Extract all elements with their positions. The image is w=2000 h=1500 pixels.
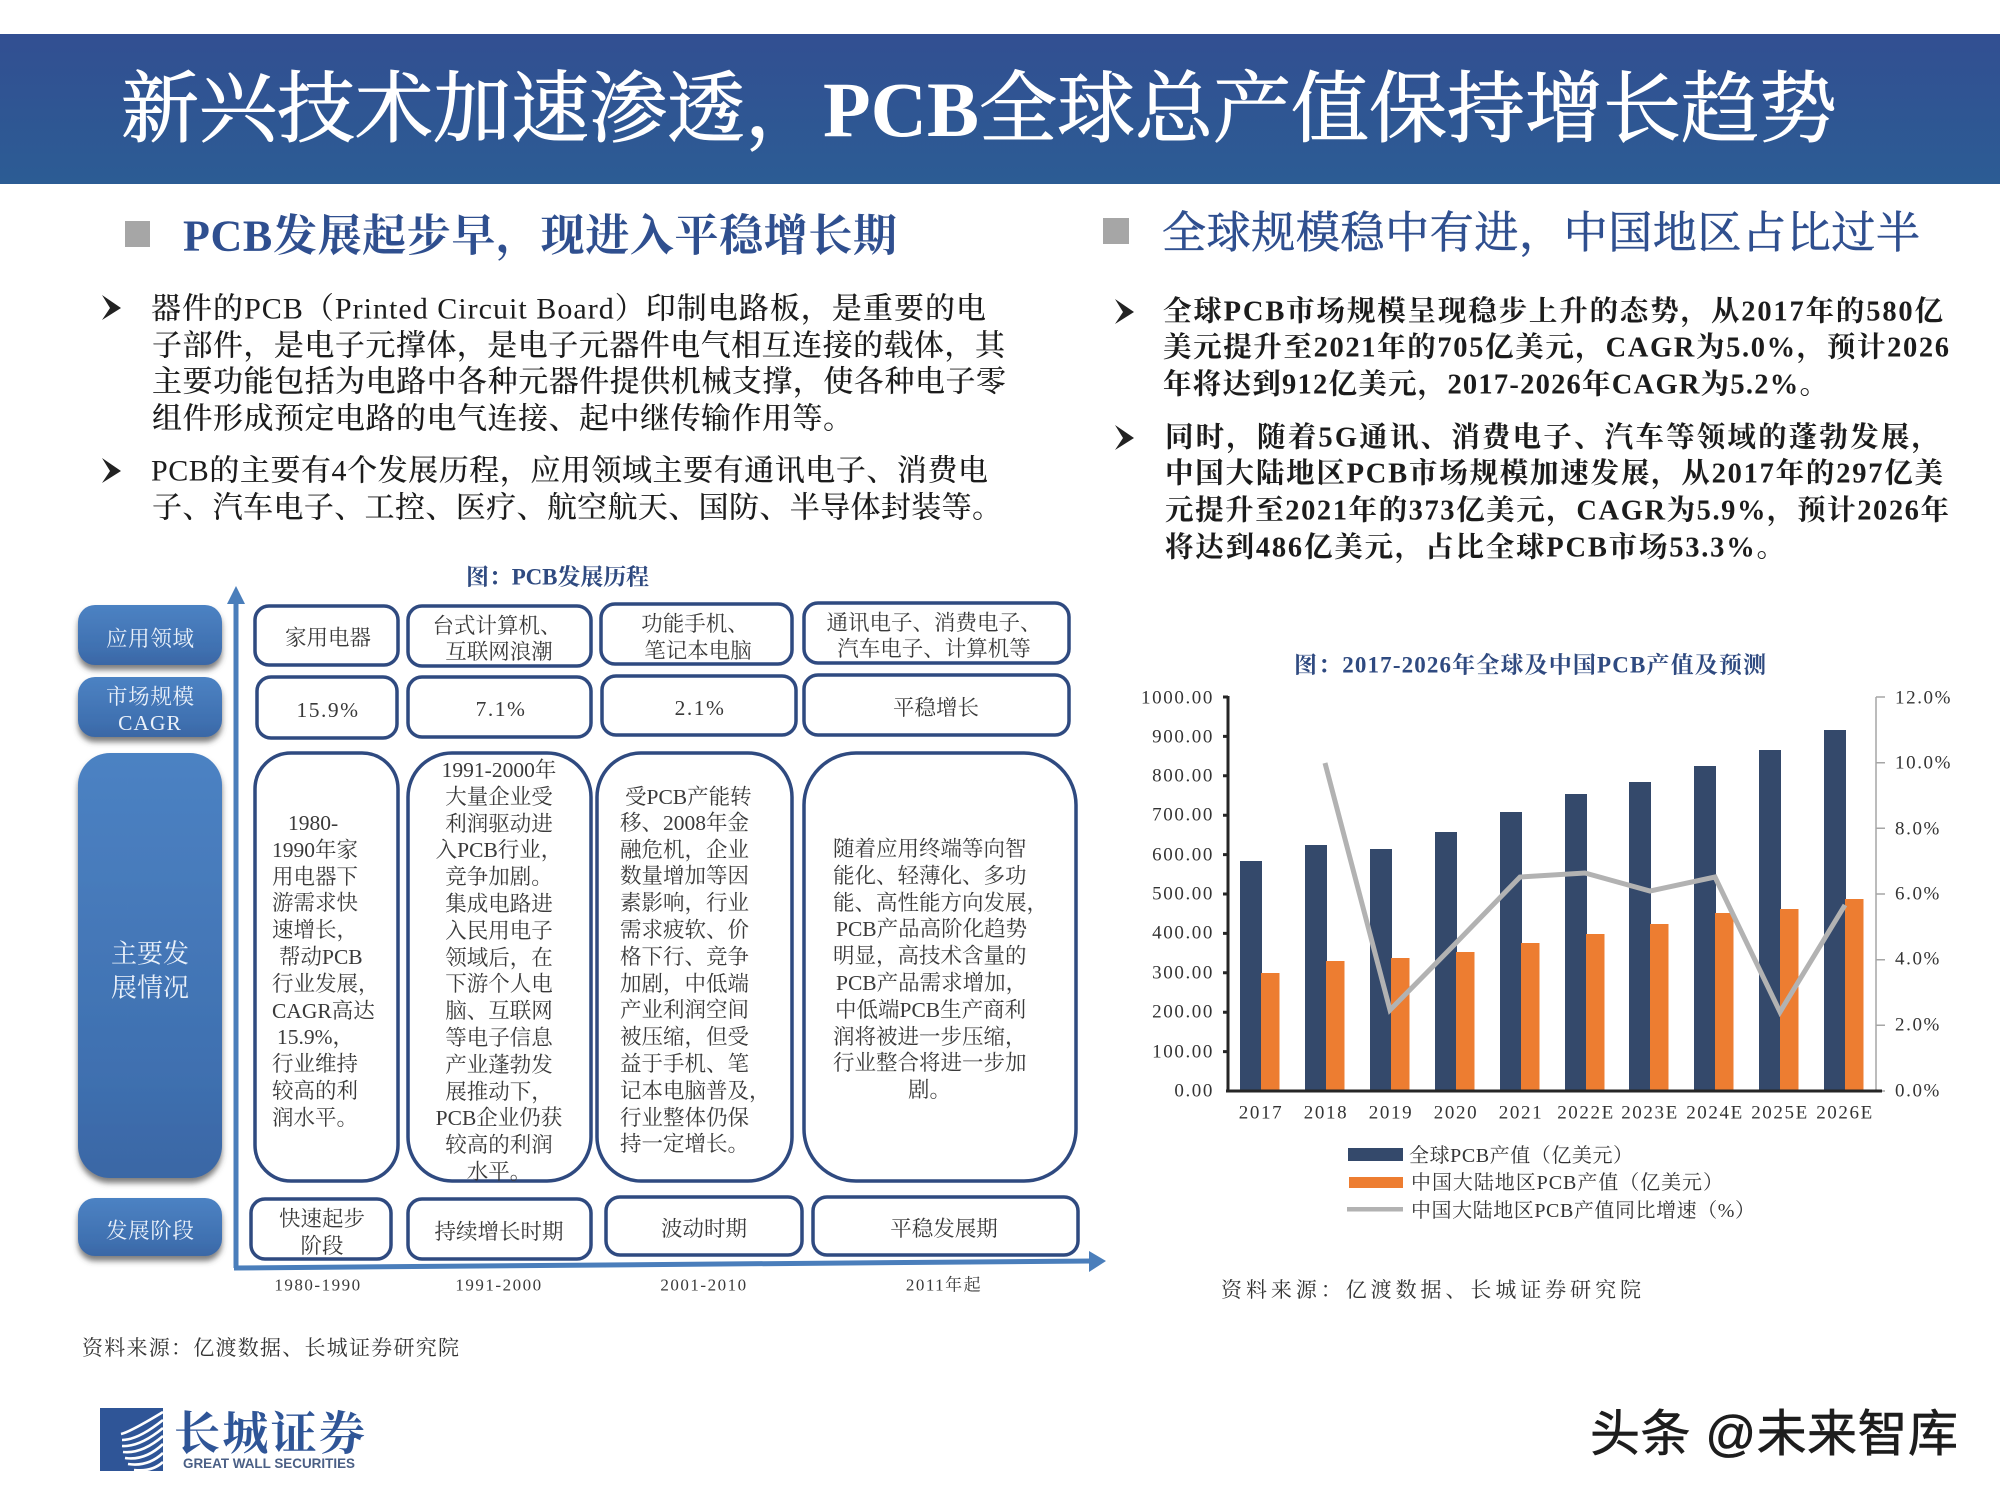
- category axis: [1226, 1091, 1882, 1124]
- row: market CAGR values: 2.1%: [675, 696, 725, 720]
- text block: global market: 年将达到912亿美元，2017-2026年CAGR为5.2%。: [1163, 368, 1828, 400]
- card: 1980-1990: 用电器下: [272, 865, 358, 889]
- card: 2001-2010: 持一定增长。: [620, 1132, 749, 1156]
- timeline year labels: 1991-2000: [455, 1276, 543, 1294]
- card: 1980-1990: 游需求快: [272, 891, 358, 915]
- arrow: vertical axis: [227, 586, 245, 1268]
- text block: PCB definition: 组件形成预定电路的电气连接、起中继传输作用等。: [152, 402, 853, 436]
- category axis: 2024E: [1686, 1102, 1744, 1124]
- card: 2001-2010: 融危机，企业: [620, 838, 749, 863]
- card: 1980-1990: 速增长，: [272, 918, 358, 943]
- label: development stage: [78, 1198, 222, 1256]
- text block: PCB definition: 器件的PCB（Printed Circuit Board）印制电路板，是重要的电: [151, 292, 986, 326]
- card: 1980-1990: 15.9%，: [277, 1025, 354, 1050]
- card: 1991-2000: 领域后，在: [445, 946, 553, 971]
- category axis: 2023E: [1621, 1102, 1679, 1124]
- card: 1980-1990: 润水平。: [272, 1106, 358, 1130]
- logo English name: GREAT WALL SECURITIES: [183, 1455, 355, 1471]
- icon: right heading square: [1103, 218, 1129, 244]
- label: market CAGR: 市场规模: [106, 685, 194, 709]
- panel: production value chart: [1141, 652, 1952, 1302]
- row: market CAGR values: [257, 675, 1069, 738]
- card: 2001-2010: 被压缩，但受: [620, 1025, 749, 1050]
- legend: 全球PCB产值（亿美元）: [1409, 1144, 1633, 1167]
- card: 2001-2010: 素影响，行业: [620, 891, 749, 916]
- right percent axis: [1876, 688, 1952, 1102]
- panel: right text: [1103, 208, 1949, 564]
- timeline year labels: 1980-1990: [274, 1276, 362, 1294]
- left value axis: [1141, 688, 1228, 1102]
- bars: global PCB value: [1240, 730, 1846, 1091]
- row: development stages: 平稳发展期: [890, 1217, 998, 1241]
- watermark: 头条 @未来智库: [1590, 1406, 1958, 1462]
- panel: PCB development timeline: [78, 564, 1106, 1360]
- icon: bullet arrow: [102, 295, 121, 320]
- card: 2001-2010: 移、2008年金: [620, 811, 749, 835]
- legend: 中国大陆地区PCB产值同比增速（%）: [1411, 1199, 1755, 1222]
- card: 1991-2000: 入民用电子: [445, 919, 553, 943]
- category axis: 2025E: [1751, 1102, 1809, 1124]
- text block: PCB stages: PCB的主要有4个发展历程，应用领域主要有通讯电子、消费电: [151, 454, 988, 488]
- label: application field: [78, 605, 222, 665]
- timeline year labels: 2001-2010: [660, 1276, 748, 1294]
- right percent axis: 12.0%: [1895, 688, 1952, 708]
- card: 1991-2000: 入PCB行业，: [436, 838, 562, 863]
- card: 2001-2010: 产业利润空间: [620, 998, 749, 1022]
- right percent axis: 8.0%: [1895, 818, 1941, 840]
- row: application fields: 通讯电子、消费电子、: [826, 611, 1042, 635]
- category axis: 2026E: [1816, 1102, 1874, 1124]
- title banner: [0, 34, 2000, 184]
- card: 2011 onward: 能、高性能方向发展，: [833, 891, 1048, 916]
- card: 2001-2010: 需求疲软、价: [620, 918, 749, 942]
- row: application fields: 互联网浪潮: [445, 640, 553, 664]
- legend: 中国大陆地区PCB产值（亿美元）: [1411, 1171, 1723, 1194]
- right percent axis: 2.0%: [1895, 1014, 1941, 1036]
- left value axis: 800.00: [1152, 766, 1214, 786]
- right percent axis: 6.0%: [1895, 884, 1941, 904]
- left value axis: 600.00: [1152, 844, 1214, 866]
- row: development stages: 快速起步: [279, 1207, 365, 1231]
- left value axis: 400.00: [1152, 922, 1214, 944]
- icon: bullet arrow: [1115, 425, 1134, 450]
- card: 1980-1990: 1980-: [288, 811, 338, 835]
- icon: logo mark: [100, 1408, 163, 1471]
- left value axis: 300.00: [1152, 962, 1214, 984]
- card: 2001-2010: 益于手机、笔: [620, 1052, 749, 1076]
- category axis: 2019: [1369, 1102, 1413, 1124]
- row: market CAGR values: 平稳增长: [893, 696, 979, 720]
- text block: China market: 将达到486亿美元，占比全球PCB市场53.3%。: [1165, 532, 1785, 564]
- card: 1980-1990: 1990年家: [272, 838, 358, 862]
- panel: left text: [102, 212, 1007, 524]
- card: 2011 onward: 润将被进一步压缩，: [833, 1025, 1027, 1050]
- card: 1991-2000: 利润驱动进: [445, 812, 553, 836]
- card: 2011 onward: 剧。: [908, 1078, 951, 1102]
- card: 1980-1990: 行业发展，: [272, 972, 380, 997]
- label: main development: 展情况: [111, 974, 189, 1002]
- text block: global market: 全球PCB市场规模呈现稳步上升的态势，从2017年的580亿: [1163, 296, 1943, 328]
- category axis: 2022E: [1557, 1102, 1615, 1124]
- card: 2011 onward: 中低端PCB生产商利: [835, 998, 1026, 1022]
- card: 2001-2010: 受PCB产能转: [625, 785, 752, 809]
- card: 2001-2010: [597, 753, 792, 1181]
- row: application fields: 笔记本电脑: [644, 639, 752, 663]
- icon: left heading square: [125, 221, 150, 247]
- bars: China PCB value: [1261, 899, 1864, 1091]
- chart title: production value: 图：2017-2026年全球及中国PCB产值及预测: [1294, 652, 1766, 678]
- text block: PCB definition: 主要功能包括为电路中各种元器件提供机械支撑，使各种电子零: [152, 366, 1006, 400]
- legend: [1347, 1144, 1755, 1222]
- card: 2001-2010: 行业整体仍保: [620, 1106, 749, 1130]
- card: 1980-1990: 较高的利: [272, 1079, 358, 1103]
- card: 1991-2000: PCB企业仍获: [436, 1106, 562, 1130]
- card: 1991-2000: 产业蓬勃发: [445, 1053, 553, 1077]
- logo: Great Wall Securities: [100, 1408, 365, 1471]
- card: 2001-2010: 格下行、竞争: [620, 945, 749, 969]
- card: 1991-2000: 集成电路进: [445, 892, 553, 916]
- card: 1991-2000: 等电子信息: [445, 1026, 553, 1050]
- category axis: 2021: [1499, 1102, 1543, 1124]
- right percent axis: 0.0%: [1895, 1080, 1941, 1102]
- card: 2011 onward: 明显，高技术含量的: [833, 944, 1027, 969]
- label: market CAGR: [78, 677, 222, 737]
- left value axis: 500.00: [1152, 884, 1214, 904]
- row: development details: [255, 753, 1076, 1184]
- label: development stage: 发展阶段: [106, 1219, 194, 1243]
- label: main development: 主要发: [111, 940, 189, 968]
- line: China growth rate: [1325, 763, 1845, 1012]
- timeline year labels: 2011年起: [906, 1274, 982, 1294]
- card: 1991-2000: 展推动下，: [445, 1080, 553, 1105]
- label: main development: [78, 753, 222, 1178]
- card: 2011 onward: PCB产品高阶化趋势: [836, 917, 1027, 941]
- card: 2011 onward: PCB产品需求增加，: [836, 971, 1027, 996]
- card: 1980-1990: CAGR高达: [272, 999, 375, 1023]
- logo wordmark: 长城证券: [174, 1408, 365, 1460]
- row: application fields: 家用电器: [285, 626, 371, 650]
- row: application fields: 台式计算机、: [432, 614, 562, 638]
- row: application fields: 功能手机、: [641, 612, 749, 636]
- category axis: 2018: [1304, 1102, 1348, 1124]
- row: application fields: [255, 603, 1069, 666]
- left value axis: 200.00: [1152, 1002, 1214, 1022]
- left value axis: 0.00: [1174, 1080, 1214, 1102]
- heading: PCB history: PCB发展起步早，现进入平稳增长期: [183, 212, 897, 260]
- title: 新兴技术加速渗透，PCB全球总产值保持增长趋势: [121, 66, 1837, 152]
- card: 2001-2010: 记本电脑普及，: [620, 1079, 771, 1104]
- row: market CAGR values: 15.9%: [296, 698, 360, 722]
- source: timeline: 资料来源：亿渡数据、长城证券研究院: [82, 1336, 459, 1360]
- card: 1991-2000: 竞争加剧。: [445, 865, 553, 889]
- card: 1991-2000: 1991-2000年: [442, 758, 556, 782]
- text block: China market: 同时，随着5G通讯、消费电子、汽车等领域的蓬勃发展，: [1165, 422, 1940, 454]
- text block: China market: 中国大陆地区PCB市场规模加速发展，从2017年的297亿美: [1165, 458, 1943, 490]
- icon: bullet arrow: [1115, 299, 1134, 324]
- source: chart: 资料来源：亿渡数据、长城证券研究院: [1221, 1278, 1641, 1302]
- card: 1991-2000: 大量企业受: [445, 785, 553, 809]
- text block: global market: [1163, 296, 1949, 400]
- row: development stages: 波动时期: [661, 1217, 747, 1241]
- left value axis: 700.00: [1152, 804, 1214, 826]
- text block: PCB stages: 子、汽车电子、工控、医疗、航空航天、国防、半导体封装等。: [152, 492, 1002, 524]
- right percent axis: 4.0%: [1895, 948, 1941, 970]
- arrow: horizontal axis: [234, 1251, 1106, 1272]
- chart title: timeline: 图：PCB发展历程: [466, 564, 649, 590]
- card: 1991-2000: 下游个人电: [445, 972, 553, 996]
- card: 1991-2000: 水平。: [467, 1160, 531, 1184]
- text block: China market: [1165, 422, 1949, 564]
- card: 1980-1990: 行业维持: [272, 1052, 358, 1076]
- icon: bullet arrow: [102, 458, 121, 483]
- row: market CAGR values: 7.1%: [476, 697, 526, 721]
- card: 2001-2010: 数量增加等因: [620, 864, 749, 888]
- timeline year labels: [274, 1274, 982, 1294]
- left value axis: 100.00: [1152, 1042, 1214, 1062]
- card: 2011 onward: [804, 753, 1076, 1181]
- text block: PCB definition: 子部件，是电子元撑体，是电子元器件电气相互连接的载体，其: [152, 330, 1007, 364]
- label: market CAGR: CAGR: [118, 711, 182, 735]
- card: 2011 onward: 能化、轻薄化、多功: [833, 864, 1027, 888]
- card: 1991-2000: 较高的利润: [445, 1133, 553, 1157]
- category axis: 2017: [1239, 1102, 1283, 1124]
- card: 1980-1990: [255, 753, 398, 1181]
- text block: China market: 元提升至2021年的373亿美元，CAGR为5.9%，预计2026年: [1165, 494, 1949, 526]
- text block: PCB stages: [151, 454, 1002, 524]
- label: application field: 应用领域: [106, 627, 194, 651]
- right percent axis: 10.0%: [1895, 752, 1952, 774]
- heading: global scale: 全球规模稳中有进，中国地区占比过半: [1162, 208, 1920, 258]
- row: application fields: 汽车电子、计算机等: [837, 637, 1031, 661]
- row: development stages: [251, 1197, 1078, 1259]
- left value axis: 1000.00: [1141, 688, 1214, 708]
- card: 1980-1990: 帮动PCB: [279, 945, 363, 969]
- left value axis: 900.00: [1152, 726, 1214, 748]
- category axis: 2020: [1434, 1102, 1478, 1124]
- card: 1991-2000: 脑、互联网: [445, 999, 553, 1023]
- text block: PCB definition: [151, 292, 1007, 436]
- text block: global market: 美元提升至2021年的705亿美元，CAGR为5.0%，预计2026: [1163, 330, 1949, 364]
- card: 1991-2000: [408, 753, 591, 1184]
- card: 2011 onward: 行业整合将进一步加: [833, 1051, 1027, 1075]
- card: 2001-2010: 加剧，中低端: [620, 972, 749, 997]
- card: 2011 onward: 随着应用终端等向智: [833, 837, 1027, 861]
- row: development stages: 持续增长时期: [434, 1220, 564, 1244]
- row: development stages: 阶段: [300, 1234, 344, 1258]
